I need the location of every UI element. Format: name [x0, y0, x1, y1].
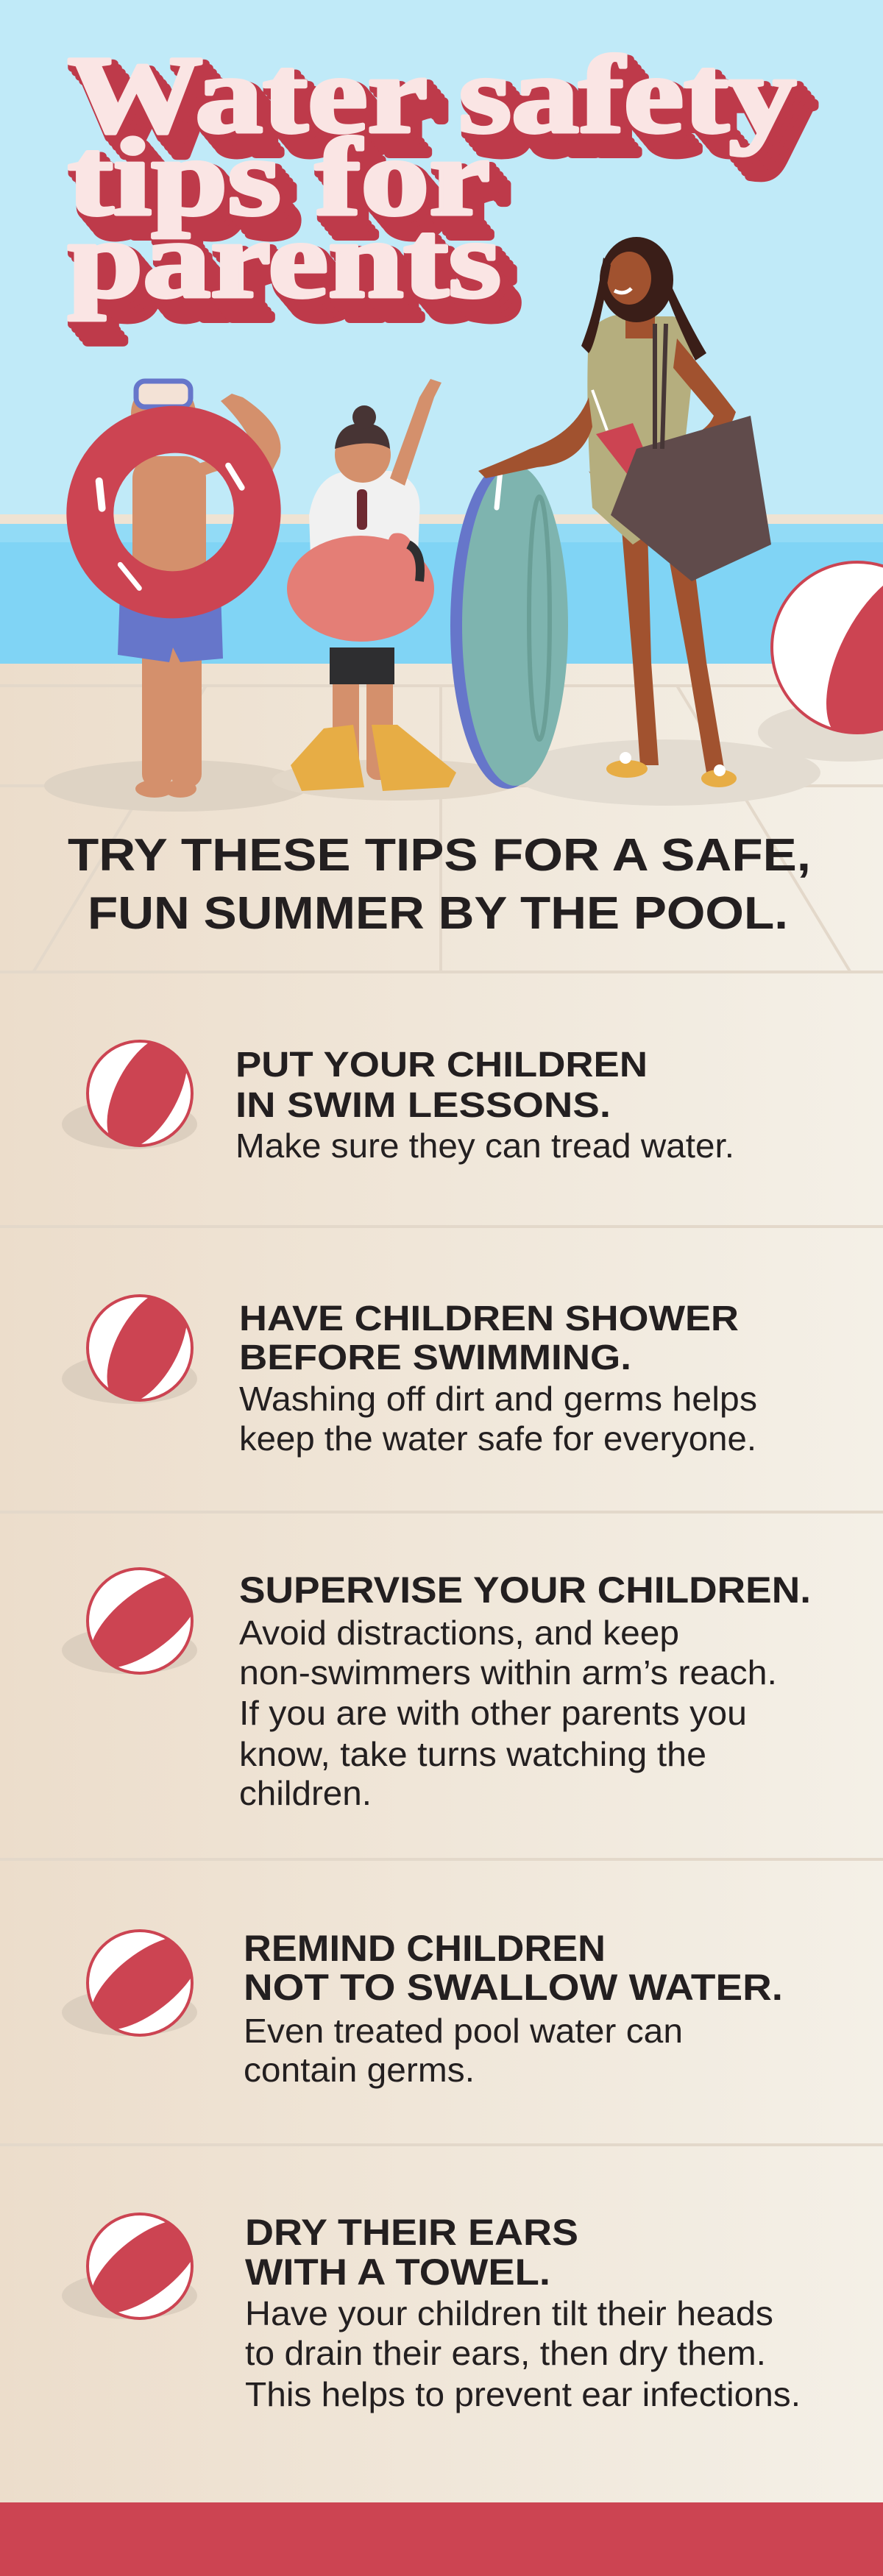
text: tip 5: to drain their ears, then dry them. — [245, 2334, 766, 2372]
title: tips for — [79, 129, 501, 252]
text: tip 2 — [239, 1299, 757, 1458]
text: tip 1: PUT YOUR CHILDREN — [235, 1046, 648, 1085]
text: tip 4: NOT TO SWALLOW WATER. — [244, 1967, 783, 2008]
icon: beach ball — [62, 1294, 197, 1404]
woman — [478, 237, 771, 787]
tip 5: dry ears — [62, 2202, 801, 2413]
text: tip 3: Avoid distractions, and keep — [239, 1614, 679, 1652]
title: Water safety — [68, 34, 796, 156]
text: tip 2: BEFORE SWIMMING. — [239, 1338, 631, 1377]
title: parents — [79, 212, 512, 334]
subtitle — [68, 830, 811, 939]
text: tip 1: Make sure they can tread water. — [235, 1126, 734, 1165]
shadows on deck — [44, 760, 309, 812]
text: tip 5 — [245, 2212, 801, 2413]
text: tip 3 — [239, 1569, 811, 1812]
boy — [63, 381, 285, 798]
text: tip 4: REMIND CHILDREN — [244, 1928, 606, 1969]
text: tip 3: know, take turns watching the — [239, 1735, 706, 1773]
text: tip 3: non-swimmers within arm’s reach. — [239, 1653, 777, 1692]
tote bag — [611, 416, 771, 581]
title: Water safety — [71, 38, 800, 160]
text: tip 3: SUPERVISE YOUR CHILDREN. — [239, 1569, 811, 1611]
subtitle: TRY THESE TIPS FOR A SAFE, — [68, 830, 811, 881]
tip 2: shower — [62, 1294, 756, 1457]
text: tip 2: HAVE CHILDREN SHOWER — [239, 1299, 739, 1338]
icon: beach ball — [62, 2213, 197, 2320]
tip 1: swim lessons — [62, 1040, 731, 1164]
icon: beach ball — [62, 1040, 197, 1149]
text: tip 4: Even treated pool water can — [244, 2012, 683, 2050]
title: parents — [82, 216, 516, 338]
title: parents — [71, 203, 505, 325]
icon: beach ball — [62, 1929, 197, 2037]
title: parents — [75, 207, 508, 330]
title: parents — [68, 199, 501, 321]
cup — [596, 423, 662, 500]
text: tip 5: Have your children tilt their heads — [245, 2294, 773, 2332]
title: tips for — [75, 125, 497, 247]
text: tip 4: contain germs. — [244, 2051, 475, 2089]
text: tip 3: If you are with other parents you — [239, 1694, 747, 1732]
title: Water safety — [79, 47, 807, 169]
title: Water safety — [75, 43, 804, 165]
title: tips for — [71, 121, 494, 243]
title: Water safety — [86, 56, 815, 178]
title: tips for — [68, 116, 490, 238]
text: tip 5: WITH A TOWEL. — [245, 2252, 550, 2293]
text: tip 1 — [235, 1046, 734, 1165]
text: tip 2: keep the water safe for everyone. — [239, 1419, 756, 1458]
title: parents — [86, 221, 519, 343]
text: tip 5: This helps to prevent ear infections. — [245, 2375, 801, 2413]
icon: beach ball — [62, 1567, 197, 1675]
fins — [291, 725, 364, 791]
sandals — [606, 760, 648, 778]
text: tip 2: Washing off dirt and germs helps — [239, 1380, 757, 1418]
tip 4: swallow water — [62, 1919, 783, 2089]
footer bar — [0, 2502, 883, 2576]
subtitle: FUN SUMMER BY THE POOL. — [88, 888, 788, 939]
background: pool water — [0, 524, 883, 664]
inflatable mat — [450, 462, 568, 789]
red swim ring — [63, 402, 285, 622]
text: tip 1: IN SWIM LESSONS. — [235, 1086, 611, 1125]
tip 3: supervise — [62, 1557, 811, 1812]
beach ball (right) — [770, 561, 883, 734]
flamingo float — [287, 536, 434, 642]
illustration: family at the pool — [44, 237, 883, 812]
title: tips for — [82, 134, 505, 256]
title — [68, 34, 815, 343]
title: Water safety — [82, 52, 811, 174]
text: tip 5: DRY THEIR EARS — [245, 2212, 578, 2253]
girl — [287, 379, 456, 791]
text: tip 4 — [244, 1928, 783, 2089]
text: tip 3: children. — [239, 1774, 372, 1812]
background: sky — [0, 0, 883, 514]
title: tips for — [86, 138, 508, 260]
